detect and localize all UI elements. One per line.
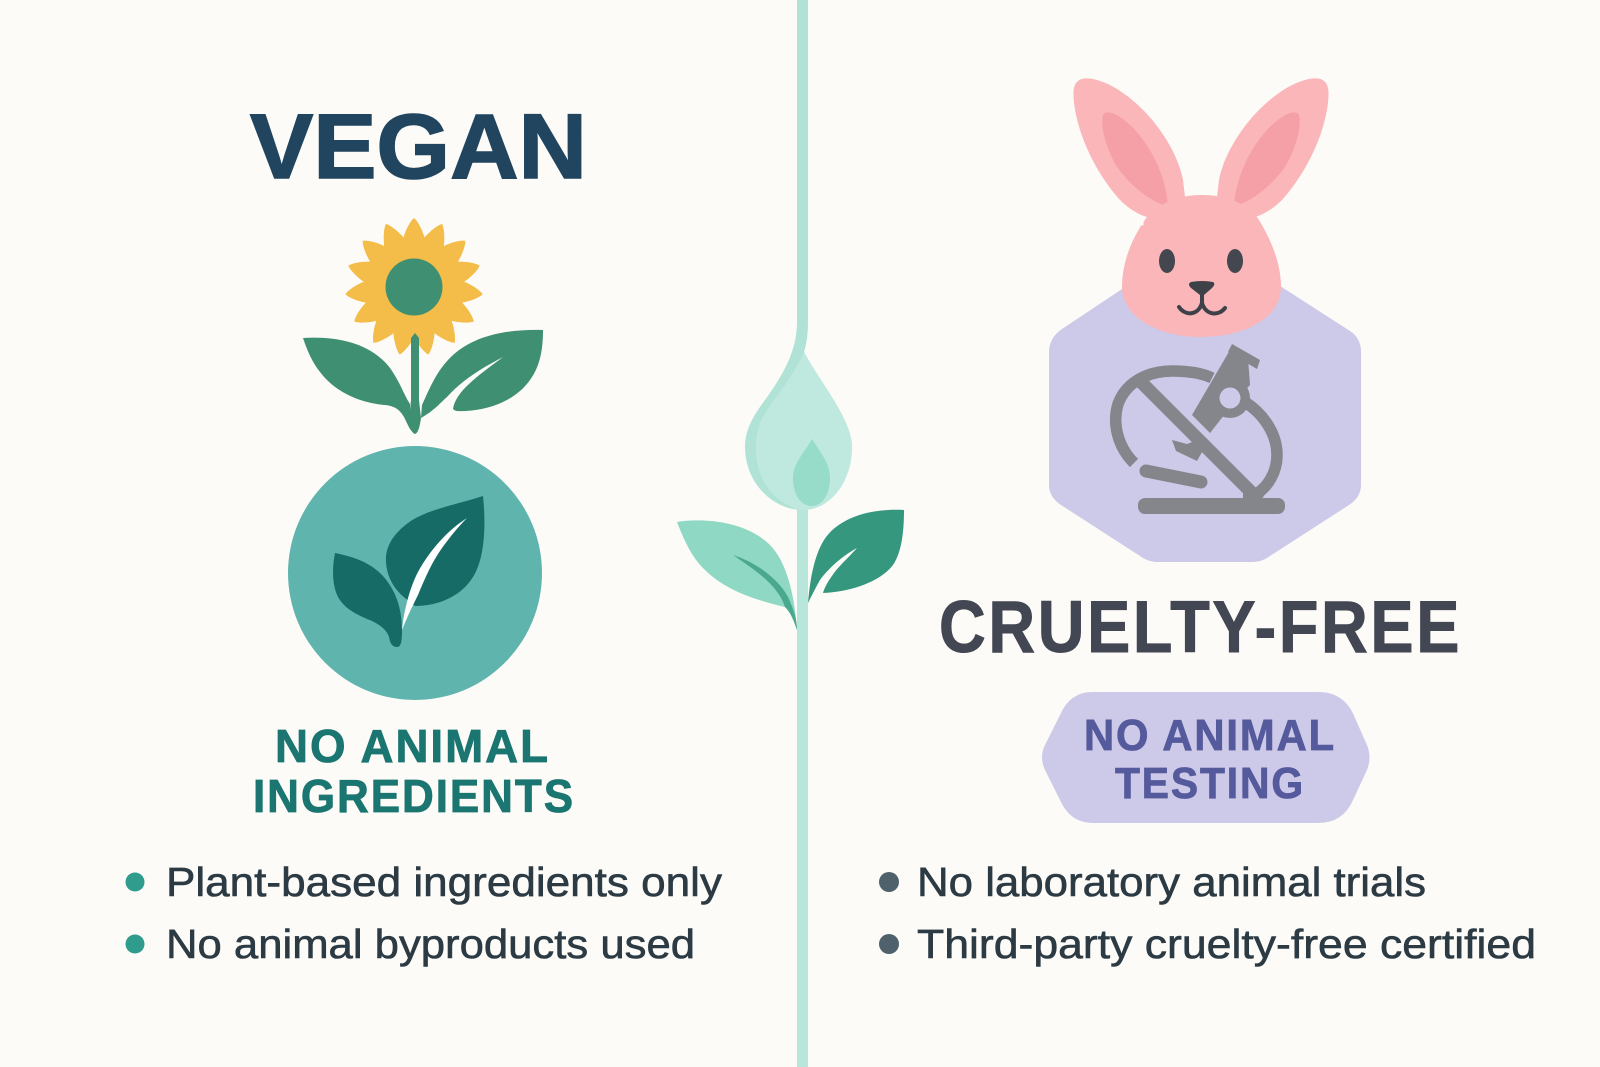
badge circle — [288, 446, 542, 700]
panel: cruelty-free — [879, 78, 1536, 967]
microscope slide — [1146, 471, 1201, 482]
drop outer with upper line — [745, 0, 852, 510]
sunflower right leaf — [421, 330, 543, 418]
icon: leaf badge — [288, 446, 542, 700]
icon: bunny — [1073, 78, 1329, 337]
bunny left ear — [1073, 78, 1186, 217]
bullet list: vegan — [126, 859, 723, 967]
badge leaf vein — [402, 518, 467, 630]
bunny right inner ear — [1234, 112, 1300, 206]
label: no animal ingredients: NO ANIMAL — [275, 720, 550, 772]
heading: vegan: VEGAN — [250, 96, 587, 198]
prohibition slash — [1140, 381, 1253, 494]
badge: no animal testing — [1042, 692, 1370, 823]
bunny mouth — [1179, 293, 1225, 313]
badge shape — [1042, 692, 1370, 823]
microscope eyepiece hole — [1220, 388, 1240, 408]
sunflower left leaf — [303, 338, 415, 433]
bunny left inner ear — [1102, 112, 1168, 206]
drop small core — [793, 439, 830, 506]
sprout right leaf — [808, 510, 904, 603]
microscope tube — [1192, 350, 1250, 433]
sunflower stem — [409, 333, 421, 434]
label: no animal ingredients: INGREDIENTS — [253, 770, 575, 822]
bullet: no byproducts: No animal byproducts used — [166, 921, 695, 967]
label: no animal ingredients — [253, 720, 575, 822]
crossed microscope icon — [1116, 344, 1285, 514]
icon: sunflower — [303, 218, 543, 434]
microscope arm left — [1116, 371, 1212, 463]
badge small leaf — [333, 553, 402, 647]
bullet: no lab trials: No laboratory animal trials — [917, 859, 1426, 905]
bunny left eye — [1159, 249, 1175, 273]
sprout left leaf vein — [733, 555, 797, 630]
microscope knob — [1210, 378, 1250, 418]
sunflower petals — [344, 218, 484, 357]
centre divider with drop and sprout — [677, 0, 904, 1067]
microscope base — [1138, 498, 1285, 514]
heading: cruelty-free: CRUELTY-FREE — [939, 587, 1462, 668]
bullet: plant-based: Plant-based ingredients only — [166, 859, 723, 905]
bullet: third-party certified: Third-party cruelty-free certified — [917, 921, 1536, 967]
badge text: NO ANIMAL — [1084, 711, 1336, 760]
microscope arm right — [1245, 402, 1277, 494]
microscope cap — [1228, 344, 1260, 369]
bunny head — [1122, 195, 1281, 337]
bullet list: cruelty-free — [879, 859, 1536, 967]
panel: vegan — [126, 96, 723, 967]
octagon background — [1049, 257, 1361, 562]
badge large leaf — [386, 496, 484, 606]
bunny nose — [1189, 281, 1214, 296]
octagon badge with microscope — [1049, 257, 1361, 562]
microscope stage — [1172, 440, 1202, 461]
bunny right eye — [1227, 249, 1243, 273]
drop inner — [756, 352, 852, 510]
divider line — [797, 505, 808, 1067]
sunflower centre — [386, 258, 442, 316]
badge text — [1084, 711, 1336, 808]
badge text: TESTING — [1115, 759, 1305, 808]
bunny right ear — [1216, 78, 1329, 217]
sprout left leaf — [677, 520, 797, 630]
